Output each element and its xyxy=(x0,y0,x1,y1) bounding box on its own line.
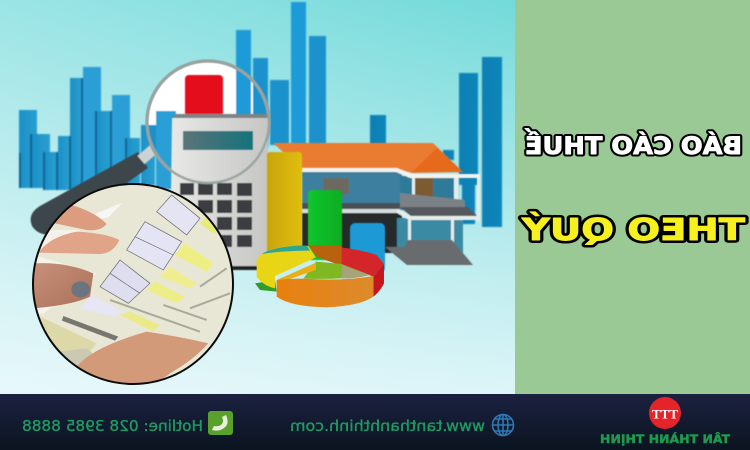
bar chart: left blue bars xyxy=(19,67,176,190)
magnifier lens xyxy=(145,59,271,173)
bottom hand xyxy=(77,332,208,387)
pen xyxy=(95,203,123,219)
upper finger xyxy=(55,206,107,230)
logo wordmark: TÂN THÀNH THỊNH xyxy=(600,431,730,446)
icon: phone xyxy=(208,411,233,435)
title line 2: THEO QUÝ xyxy=(520,211,745,248)
website text: www.tanthanhthinh.com xyxy=(290,417,485,435)
title line 1: BÁO CÁO THUẾ xyxy=(524,127,742,160)
magnifier handle xyxy=(31,148,155,234)
title line 2: THEO QUÝ xyxy=(520,211,745,248)
logo: red circle mark: TTT xyxy=(652,406,678,422)
icon: calculator xyxy=(147,61,269,270)
icon: house xyxy=(273,143,480,265)
chart: 3D pie xyxy=(255,245,384,307)
title line 1: BÁO CÁO THUẾ xyxy=(524,127,742,160)
nail xyxy=(71,281,90,297)
logo: red circle mark xyxy=(649,397,681,429)
icon: globe xyxy=(492,414,514,436)
chart: 3D columns xyxy=(267,152,385,273)
footer bar xyxy=(0,394,750,450)
panel: green title panel xyxy=(515,0,750,394)
bar chart: back blue bars xyxy=(236,2,502,227)
middle finger xyxy=(38,232,119,254)
lower left hand xyxy=(33,263,93,308)
photo: hands on tax form xyxy=(30,180,237,387)
hotline text: Hotline: 028 3985 8888 xyxy=(22,417,203,435)
barcode xyxy=(62,316,118,341)
